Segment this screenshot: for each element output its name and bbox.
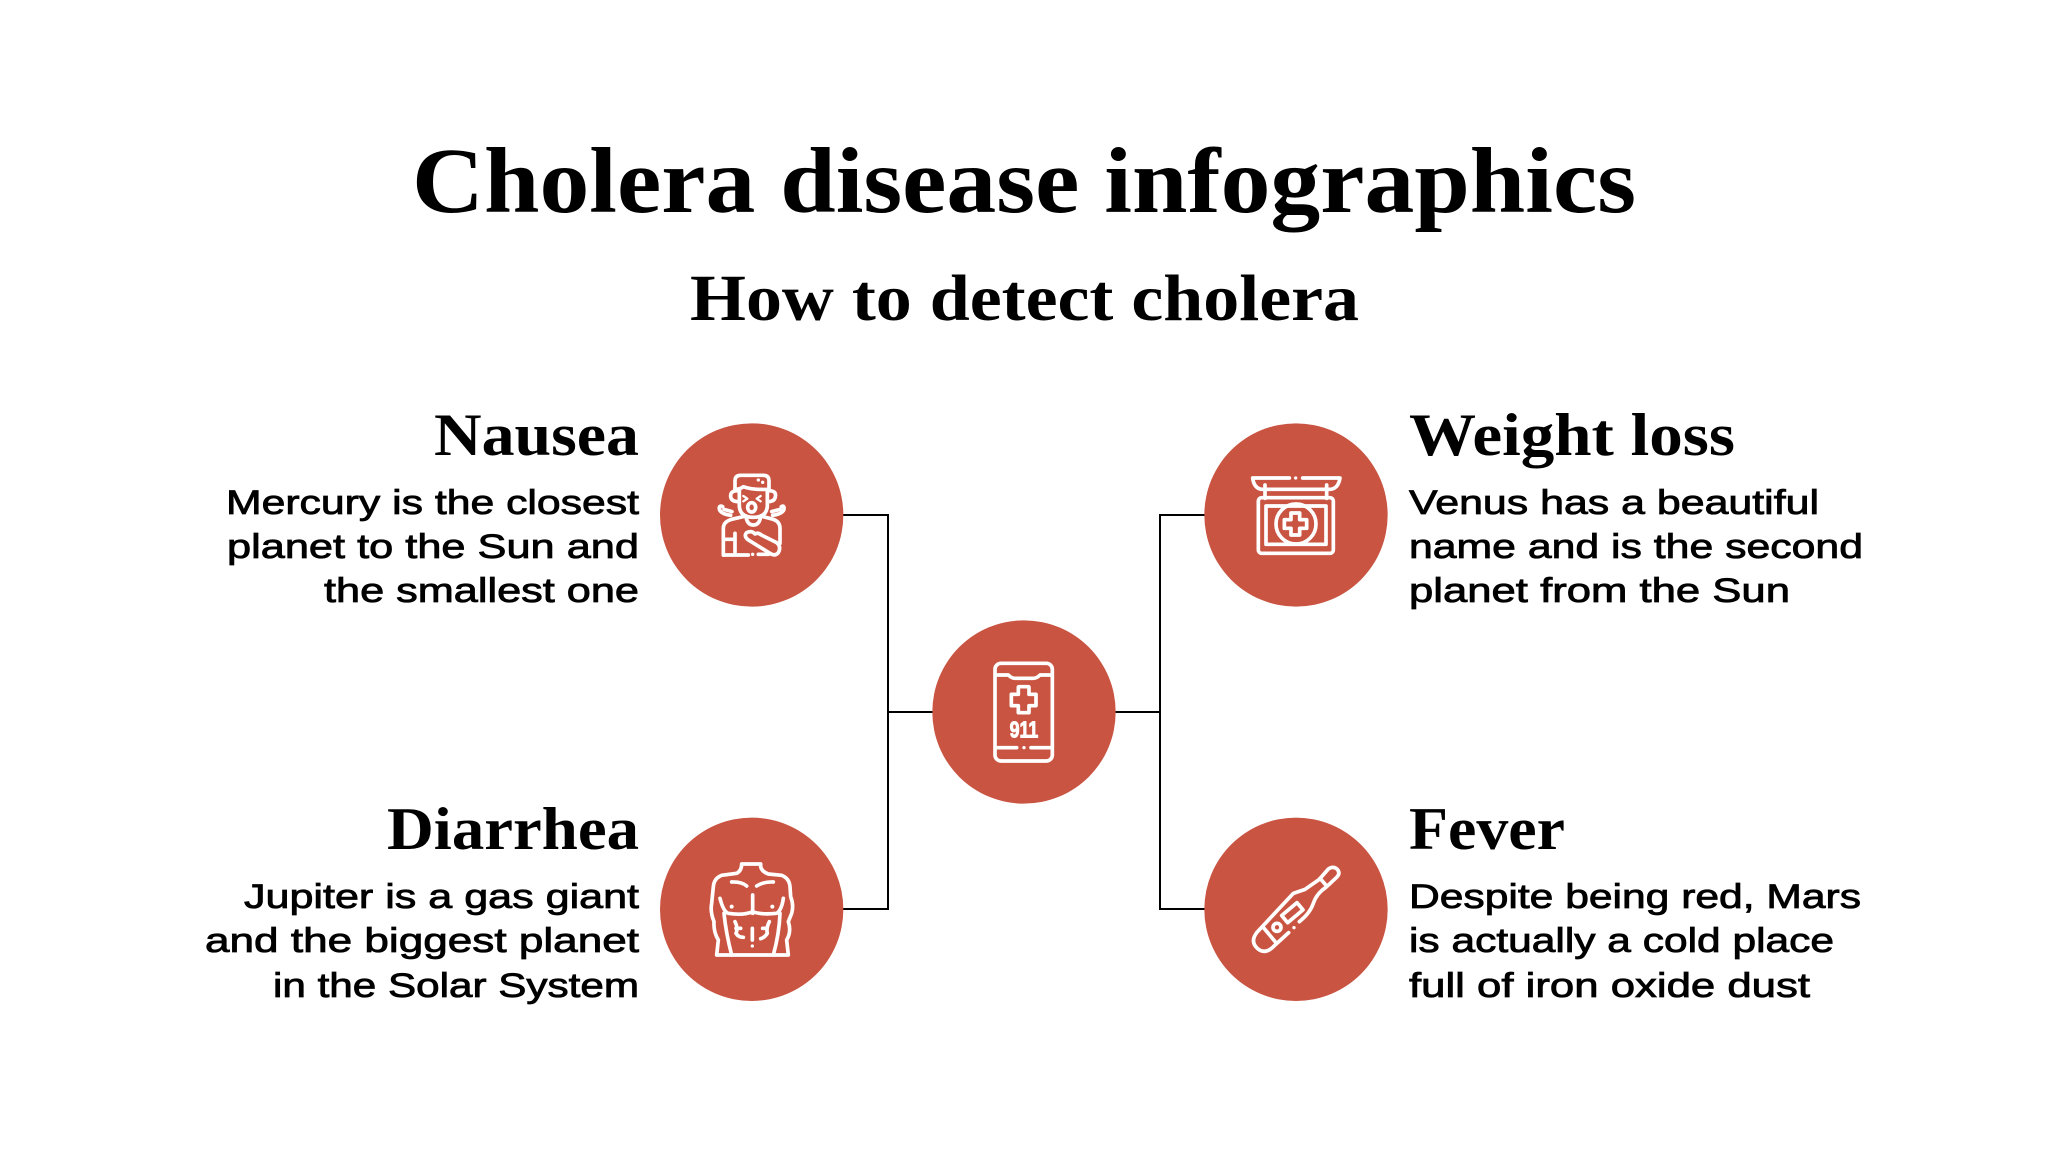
text: nausea description: Mercury is the closest bbox=[226, 484, 640, 522]
connector lines bbox=[843, 515, 1205, 909]
text: diarrhea description: Jupiter is a gas giant bbox=[244, 878, 640, 916]
panel: nausea text bbox=[226, 402, 640, 610]
text: fever description bbox=[1409, 878, 1861, 1005]
text: weight loss description: planet from the Sun bbox=[1409, 572, 1790, 610]
icon: nausea person in circle bbox=[660, 423, 843, 607]
text: diarrhea description bbox=[205, 878, 640, 1005]
icon: 911 phone in central circle: 911 bbox=[1010, 716, 1038, 742]
text: diarrhea description: in the Solar System bbox=[273, 967, 639, 1005]
icon: medical scale in circle bbox=[1204, 423, 1388, 607]
text: nausea description bbox=[226, 484, 640, 610]
heading: fever: Fever bbox=[1409, 796, 1565, 862]
text: fever description: Despite being red, Mars bbox=[1409, 878, 1861, 916]
text: fever description: is actually a cold place bbox=[1409, 922, 1834, 960]
icon: thermometer in circle bbox=[1204, 818, 1388, 1001]
title: Cholera disease infographics bbox=[412, 130, 1636, 233]
heading: diarrhea: Diarrhea bbox=[387, 796, 639, 862]
text: weight loss description: Venus has a beautiful bbox=[1409, 484, 1819, 522]
icon: 911 phone in central circle bbox=[932, 620, 1116, 804]
text: fever description: full of iron oxide dust bbox=[1409, 967, 1811, 1005]
heading: nausea: Nausea bbox=[434, 402, 639, 468]
panel: diarrhea text bbox=[205, 796, 640, 1005]
text: diarrhea description: and the biggest planet bbox=[205, 922, 640, 960]
text: nausea description: the smallest one bbox=[324, 572, 639, 610]
panel: weight loss text bbox=[1409, 402, 1863, 610]
text: weight loss description bbox=[1409, 484, 1863, 610]
text: nausea description: planet to the Sun and bbox=[227, 528, 639, 566]
panel: fever text bbox=[1409, 796, 1861, 1005]
icon: torso in circle bbox=[660, 818, 843, 1001]
text: weight loss description: name and is the second bbox=[1409, 528, 1863, 566]
subtitle: How to detect cholera bbox=[690, 262, 1359, 335]
heading: weight loss: Weight loss bbox=[1409, 402, 1735, 468]
